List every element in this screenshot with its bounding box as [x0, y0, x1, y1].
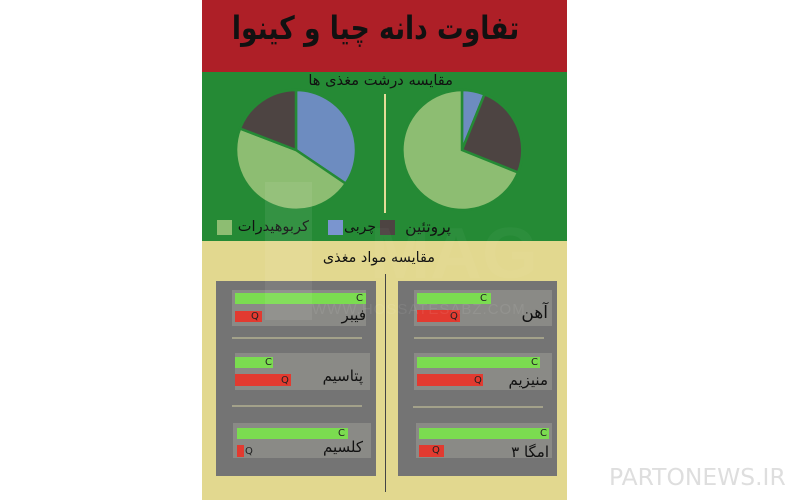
legend: protein: پروتئین: [405, 218, 451, 236]
legend: fat: چربی: [344, 219, 376, 235]
panel: nutrients comparison: [202, 241, 567, 500]
row: fiber: فیبر: [342, 306, 366, 324]
row: fiber: C: [356, 293, 363, 304]
row: calcium: [233, 423, 371, 458]
watermark: url: WWW.HOSSATESABZ.COM: [312, 301, 526, 318]
row: omega 3: C: [540, 428, 547, 439]
row: potassium: [235, 353, 370, 390]
row: fiber: Q: [251, 311, 259, 322]
title band: [202, 0, 567, 72]
row: iron: Q: [450, 311, 458, 322]
title: تفاوت دانه چیا و کینوا: [232, 9, 519, 47]
row: omega 3: Q: [432, 445, 440, 456]
legend: fat: [328, 219, 376, 235]
heading: macronutrients: مقایسه درشت مغذی ها: [308, 72, 453, 89]
panel: left nutrient bars: [216, 281, 376, 476]
row: magnesium: [414, 353, 552, 390]
row: iron: آهن: [521, 303, 548, 323]
row: iron: [414, 290, 552, 326]
heading: nutrients: مقایسه مواد مغذی: [323, 250, 435, 266]
row: potassium: پتاسیم: [323, 367, 363, 385]
row: omega 3: [416, 423, 552, 458]
row: magnesium: منیزیم: [508, 371, 548, 389]
legend: carbohydrates: کربوهیدرات: [238, 218, 309, 235]
source watermark: PARTONEWS.IR: [609, 463, 786, 491]
divider: [384, 94, 386, 213]
watermark: MAG: MAG: [370, 214, 538, 294]
row: iron: C: [480, 293, 487, 304]
pie chart: quinoa: [402, 90, 522, 210]
row: omega 3: امگا ۳: [511, 443, 549, 461]
pie chart: chia: [236, 90, 356, 210]
panel: right nutrient bars: [398, 281, 557, 476]
row: magnesium: C: [531, 357, 538, 368]
panel: macronutrient comparison: [202, 72, 567, 241]
row: fiber: [232, 290, 366, 326]
row: calcium: C: [338, 428, 345, 439]
row: magnesium: Q: [474, 375, 482, 386]
divider: [385, 274, 386, 492]
legend: protein: [380, 218, 451, 236]
row: calcium: کلسیم: [323, 438, 363, 456]
row: potassium: Q: [281, 375, 289, 386]
watermark: logo block: [265, 182, 312, 320]
row: potassium: C: [265, 357, 272, 368]
row: calcium: Q: [245, 446, 253, 457]
